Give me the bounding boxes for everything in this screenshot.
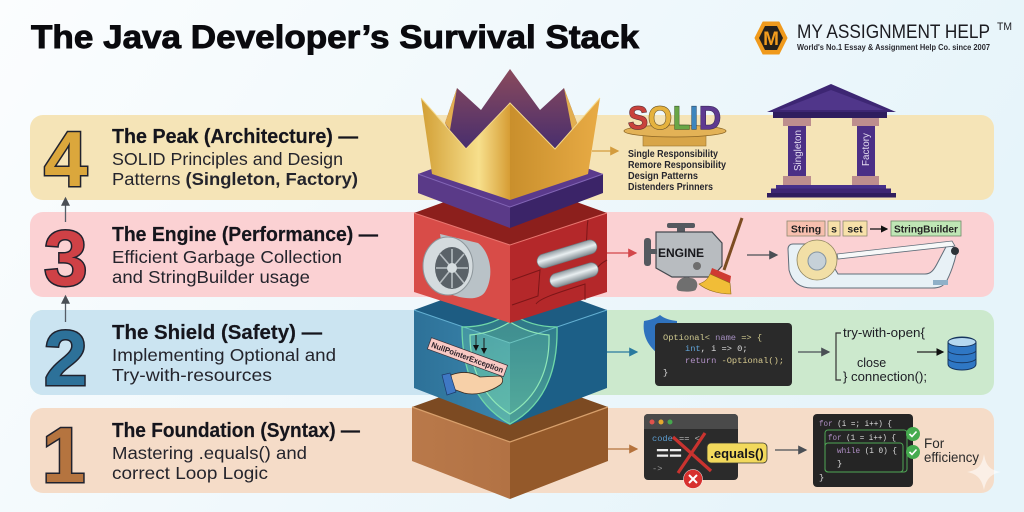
stack block: red engine	[414, 178, 607, 323]
text block: The Foundation: correct Loop Logic	[112, 463, 268, 483]
code panel: Optional: int, i => 0;	[685, 344, 748, 354]
number 3: 3	[44, 214, 87, 302]
text block: The Foundation: Mastering .equals() and	[112, 443, 307, 463]
title: The Java Developer’s Survival Stack	[31, 19, 640, 55]
arrow: peak connector	[592, 150, 618, 152]
try-with-resources text: try-with-open{	[843, 326, 925, 340]
number 2: 2	[44, 314, 87, 402]
box: set: set	[847, 224, 863, 236]
text block: The Shield: The Shield (Safety) —	[112, 322, 322, 344]
code panel: loops: for (1 = i++) {	[828, 433, 896, 443]
box: set	[843, 221, 867, 236]
icon: red cross	[673, 433, 711, 488]
code panel: loops	[813, 414, 913, 487]
icon: SOLID on plate	[624, 100, 726, 146]
code panel: loops: for (i =; i++) {	[819, 419, 892, 429]
String to StringBuilder diagram	[787, 221, 961, 236]
arrow: engine to tape	[747, 254, 777, 256]
icon: glass shield	[462, 313, 557, 424]
panel: row 3 background	[30, 212, 994, 297]
icon: SOLID on plate: O	[648, 100, 672, 136]
try-with-resources text	[836, 326, 927, 384]
text block: The Foundation: The Foundation (Syntax) —	[112, 420, 360, 442]
box: String	[787, 221, 825, 236]
text block: The Foundation	[112, 420, 360, 483]
text block: The Engine: Efficient Garbage Collection	[112, 247, 342, 267]
arrow: to StringBuilder	[870, 228, 887, 230]
icon: hand	[442, 373, 503, 395]
text: For efficiency: For	[924, 436, 945, 451]
watermark sparkle	[967, 454, 1001, 490]
try-with-resources text: } connection();	[843, 370, 927, 384]
panel seams	[512, 220, 607, 305]
logo: My Assignment Help	[755, 21, 1012, 54]
code panel: loops: }	[819, 473, 824, 483]
stack block: blue shield	[414, 275, 607, 425]
text block: The Engine: and StringBuilder usage	[112, 267, 310, 287]
icon: hexagon logo: M	[763, 29, 779, 50]
arrow: step 3 to 4	[64, 198, 66, 222]
arrow: engine connector	[607, 252, 636, 254]
label: .equals()	[707, 443, 767, 463]
icon: engine with broom: ENGINE	[658, 246, 704, 260]
panel: row 4 background	[30, 115, 994, 200]
code panel: Optional	[655, 323, 792, 386]
text block: The Shield: Implementing Optional and	[112, 345, 336, 365]
text: For efficiency	[924, 436, 979, 465]
arrow: code to try block	[798, 351, 829, 353]
label: .equals(): .equals()	[710, 446, 764, 461]
icon: SOLID on plate: S	[628, 100, 648, 136]
box: String: String	[791, 224, 821, 236]
icon: engine with broom	[644, 218, 742, 294]
text block: SOLID list	[628, 149, 726, 193]
text block: The Engine: The Engine (Performance) —	[112, 224, 378, 246]
code panel: wrong comparison: ->	[652, 464, 662, 474]
logo name: MY ASSIGNMENT HELP	[797, 21, 990, 43]
text block: The Shield: Try-with-resources	[112, 365, 272, 385]
icon: hexagon logo	[755, 22, 787, 54]
icon: temple with pillars	[767, 84, 896, 198]
try-with-resources text: close	[857, 356, 886, 370]
box: StringBuilder: StringBuilder	[894, 224, 958, 236]
box: s	[828, 221, 840, 236]
number 4: 4	[44, 115, 87, 203]
box: s: s	[831, 224, 837, 236]
code panel: loops: }	[837, 459, 842, 469]
text block: SOLID list: Design Patterns	[628, 171, 698, 182]
text block: The Peak: SOLID Principles and Design	[112, 149, 343, 169]
icon: blue shield behind code	[644, 315, 677, 355]
text block: The Peak	[112, 126, 358, 189]
icon: gold crown	[421, 69, 600, 200]
text block: The Shield	[112, 322, 336, 385]
code panel: Optional: Optional< name => {	[663, 333, 762, 343]
arrow: equals to loop	[775, 449, 806, 451]
panel: row 1 background	[30, 408, 994, 493]
pillar label: Singleton: Singleton	[792, 130, 804, 171]
text block: SOLID list: Remore Responsibility	[628, 160, 726, 171]
panel: row 2 background	[30, 310, 994, 395]
text block: The Engine	[112, 224, 378, 287]
arrow: step 2 to 3	[64, 296, 66, 322]
text block: The Peak: The Peak (Architecture) —	[112, 126, 358, 148]
text block: The Peak: Patterns (Singleton, Factory)	[112, 169, 358, 189]
icon: exhaust pipes	[535, 238, 600, 289]
code panel: wrong comparison: ==	[656, 443, 682, 465]
code panel: wrong comparison: code	[652, 434, 673, 444]
icon: SOLID on plate: D	[699, 100, 721, 136]
icon: SOLID on plate: I	[690, 100, 698, 136]
arrow: shield connector	[607, 351, 637, 353]
code panel: Optional: }	[663, 368, 668, 378]
text: For efficiency: efficiency	[924, 450, 979, 465]
code panel: Optional: return -Optional();	[685, 356, 784, 366]
code panel: wrong comparison	[644, 414, 738, 480]
text block: SOLID list: Distenders Prinners	[628, 182, 713, 193]
stack block: brown foundation	[412, 372, 608, 499]
logo tagline: World's No.1 Essay & Assignment Help Co. since 2007	[797, 42, 990, 52]
code panel: wrong comparison: == <	[679, 434, 700, 444]
text block: SOLID list: Single Responsibility	[628, 149, 718, 160]
icon: falling arrows	[476, 335, 484, 353]
trademark: TM	[997, 21, 1012, 33]
icon: SOLID on plate: L	[673, 100, 690, 136]
label: NullPointerException: NullPointerException	[430, 340, 505, 375]
number 1: 1	[42, 411, 85, 499]
icon: green checks	[906, 427, 920, 459]
arrow: try block to database	[917, 351, 943, 353]
icon: tape dispenser	[788, 240, 959, 288]
crown block: purple slab	[418, 140, 603, 228]
pillar label: Factory: Factory	[860, 132, 872, 166]
arrow: foundation connector	[608, 448, 637, 450]
icon: database	[948, 337, 976, 370]
icon: turbine	[423, 234, 490, 298]
code panel: loops: while (1 0) {	[837, 446, 897, 456]
